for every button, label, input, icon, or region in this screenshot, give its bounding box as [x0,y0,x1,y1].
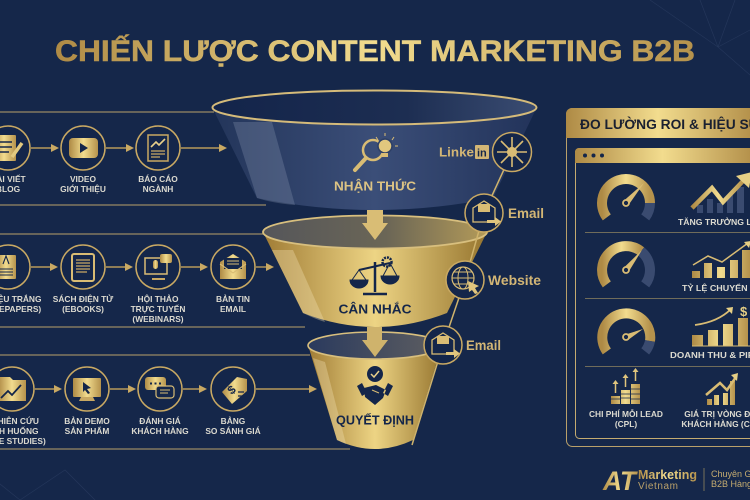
icon: newsletter [211,245,255,289]
channel: email 1: Email [508,206,544,221]
label: consideration: CÂN NHẮC [338,302,412,316]
logo: AT Marketing Vietnam: Vietnam [638,481,678,492]
funnel stage 2: consideration [263,216,487,327]
panel: ROI measurement [566,108,750,446]
logo: AT Marketing Vietnam: AT [602,466,638,496]
label: email newsletter: BẢN TIN [216,294,250,304]
icon: magnifier and bulb [355,133,398,170]
label: video: VIDEO [70,174,96,184]
channel: LinkedIn [439,132,532,172]
chart: lead growth [692,172,750,213]
label: webinars: TRỰC TUYẾN [131,304,185,314]
channel: website: Website [488,273,542,288]
arrow [35,385,62,393]
arrow [183,385,207,393]
label: report: BÁO CÁO [138,174,178,184]
label: cost per lead: (CPL) [615,419,637,429]
row 1: awareness content [0,126,227,194]
arrow [31,263,58,271]
icon: video [61,126,105,170]
channel: LinkedIn: Linke [439,144,474,160]
label: demo: SẢN PHẨM [65,425,109,436]
funnel stage 1: awareness [212,90,537,210]
icon: ebook [61,245,105,289]
label: pricing: SO SÁNH GIÁ [205,425,261,436]
channel: email 2: Email [466,338,501,353]
icon: whitepaper [0,245,30,289]
channel connector line [412,152,512,445]
label: ebooks: SÁCH ĐIỆN TỬ [53,294,113,304]
label: webinars: HỘI THẢO [138,294,178,304]
arrow [181,144,227,152]
label: ebooks: (EBOOKS) [62,304,104,314]
label: webinars: (WEBINARS) [132,314,184,324]
band lines: stage rows [0,112,350,449]
chart: conversion rate [692,241,750,278]
logo: AT Marketing Vietnam: Marketing [638,468,697,482]
icon: coins cost per lead [611,368,640,404]
icon: case studies [0,367,34,411]
funnel stage 3: decision [308,332,442,449]
arrow [256,263,274,271]
row 2: consideration content [0,245,274,324]
icon: product demo [65,367,109,411]
arrow [181,263,208,271]
channel: website [446,261,542,299]
label: pricing: BẢNG [221,416,245,426]
icon: customer reviews [138,367,182,411]
channel: email 2 [424,326,501,364]
icon: price comparison tag: $ [225,382,239,397]
icon: webinar [136,245,180,289]
logo: AT Marketing Vietnam [602,466,750,496]
arrow: consideration to decision [362,327,388,357]
icon: industry report [136,126,180,170]
chart: customer lifetime value [706,373,738,405]
icon: check badge and handshake [357,366,393,405]
arrow [31,144,59,152]
inner window [575,148,750,438]
label: report: NGÀNH [143,183,173,194]
arrow [256,385,317,393]
gauge: revenue and pipeline [602,313,650,351]
label: video: GIỚI THIỆU [60,183,106,194]
icon: price comparison tag [211,367,255,411]
channel: email 1 [465,194,544,232]
row 3: decision content [0,367,317,446]
title: CHIẾN LƯỢC CONTENT MARKETING B2B [55,34,695,68]
icon: blog article [0,126,30,170]
chart: revenue and pipeline: $ [740,304,748,319]
label: decision: QUYẾT ĐỊNH [336,412,414,428]
gauge: lead growth [602,179,650,217]
icon: scales with gear [350,258,399,294]
label: cost per lead: CHI PHÍ MỖI LEAD [589,409,663,419]
arrow [106,263,133,271]
arrow: awareness to consideration [362,210,388,240]
arrow [110,385,136,393]
gauge: conversion rate [602,246,650,284]
label: reviews: KHÁCH HÀNG [131,425,189,436]
label: reviews: ĐÁNH GIÁ [139,416,181,426]
label: demo: BẢN DEMO [64,416,110,426]
arrow [106,144,134,152]
label: email newsletter: EMAIL [220,304,246,314]
panel heading [566,108,750,138]
chart: revenue and pipeline [692,304,750,346]
channel: LinkedIn: in [477,148,487,160]
label: awareness: NHẬN THỨC [334,178,416,194]
